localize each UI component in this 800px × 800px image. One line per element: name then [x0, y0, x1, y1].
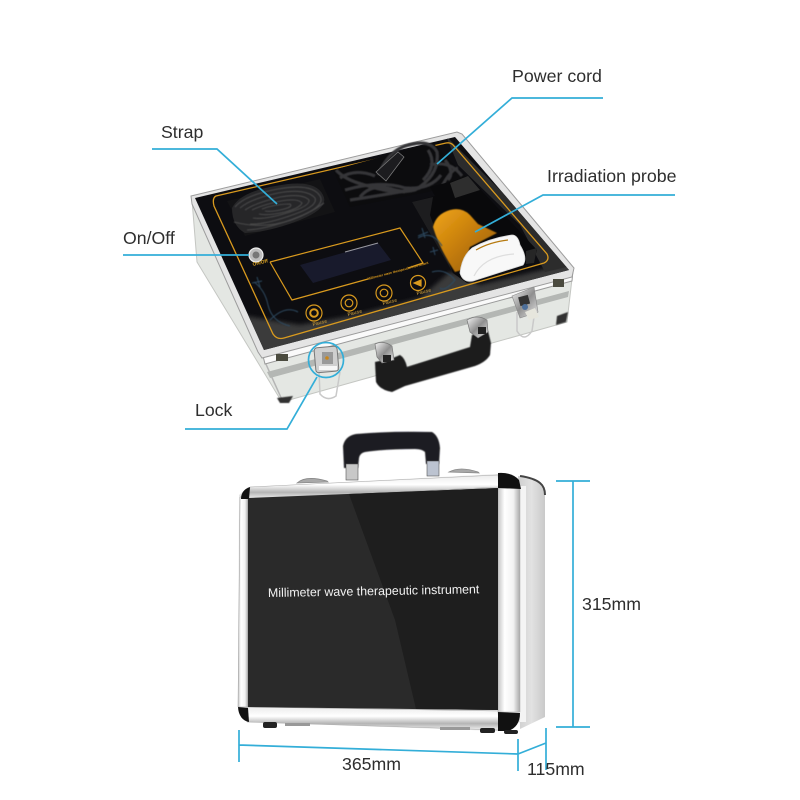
on/off button: [249, 248, 269, 268]
case front frame: [238, 474, 520, 731]
frame top bar: [248, 475, 499, 499]
callout: lock: [185, 342, 344, 429]
callout: strap: Strap: [161, 122, 203, 142]
frame right bar: [498, 488, 520, 712]
callout: on/off: On/Off: [123, 228, 175, 248]
callout: lock: Lock: [195, 400, 233, 420]
black front panel: [248, 488, 498, 710]
dimension: height 315mm: [556, 481, 641, 727]
open case with contents: [191, 132, 575, 403]
case label: Millimeter wave therapeutic instrument: [268, 582, 480, 600]
control buttons: Pause: [416, 288, 432, 297]
gold outline: [213, 143, 548, 338]
corner screws: [276, 354, 288, 361]
frame bottom bar: [247, 707, 499, 730]
dimension: width 365mm: [239, 730, 518, 774]
callout: power cord: Power cord: [512, 66, 602, 86]
callout: irradiation probe: [475, 166, 677, 232]
irradiation probe: [433, 209, 525, 281]
side wall: [518, 476, 545, 729]
closed case: [238, 432, 545, 734]
control buttons: Pause: [312, 319, 328, 328]
control buttons: [306, 276, 432, 328]
callout: strap: [152, 122, 277, 204]
right latch: [512, 287, 539, 337]
display frame: [270, 228, 430, 300]
callout: on/off: [123, 228, 249, 255]
black corners: [238, 473, 521, 731]
top latches: [297, 469, 479, 483]
callout: power cord: [437, 66, 603, 164]
control buttons: Pause: [347, 309, 363, 318]
feet: [263, 722, 518, 734]
display frame: Millimeter wave therapeutic instrument: [367, 261, 430, 281]
dimension: height 315mm: 315mm: [582, 594, 641, 614]
open case front wall: [192, 200, 573, 402]
strap recess: [227, 179, 335, 236]
case rim: [191, 132, 574, 358]
handle mounts: [375, 342, 394, 363]
on/off button: On/Off: [252, 258, 269, 268]
control buttons: Pause: [382, 298, 398, 307]
frame left bar: [238, 497, 248, 707]
probe recess: [412, 176, 537, 283]
LCD screen: [300, 243, 391, 283]
top handle: [343, 432, 440, 480]
dimension: depth 115mm: 115mm: [527, 759, 585, 779]
callout: irradiation probe: Irradiation probe: [547, 166, 677, 186]
black instrument panel: [195, 137, 569, 350]
dimension: depth 115mm: [518, 728, 585, 779]
floral decoration: [252, 228, 455, 326]
handle: [375, 331, 491, 392]
dimension: width 365mm: 365mm: [342, 754, 401, 774]
lock latch: [314, 346, 340, 399]
central latch handle mounts and lock hardware: [276, 279, 564, 399]
power cord recess: [333, 143, 467, 207]
